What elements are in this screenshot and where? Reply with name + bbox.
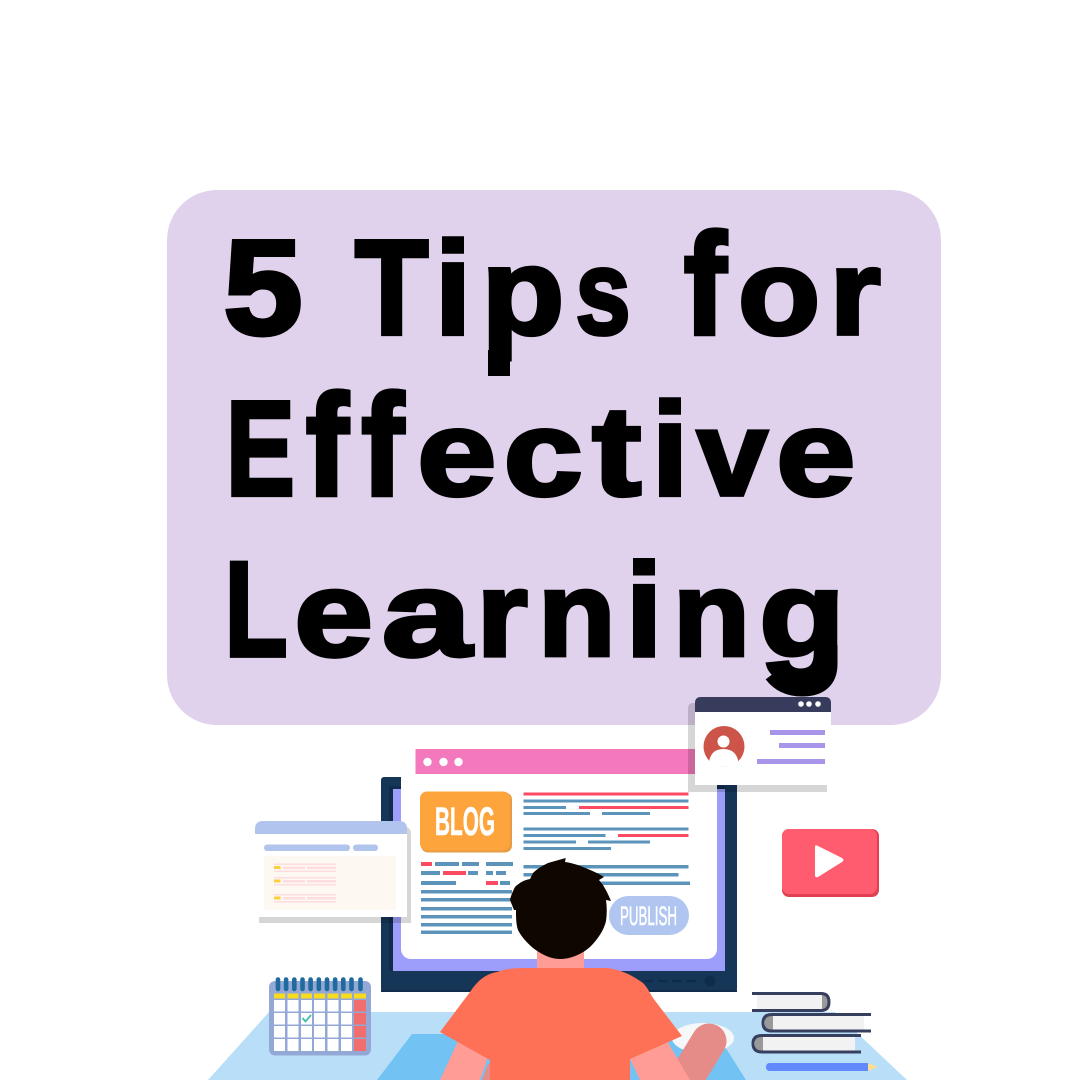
title line: Learning: a bbox=[382, 547, 473, 682]
publish button bbox=[609, 896, 689, 935]
title line: 5 Tips for bbox=[224, 204, 881, 376]
title line: Effective: e bbox=[776, 386, 855, 521]
blog badge bbox=[420, 792, 512, 852]
neck bbox=[537, 945, 584, 975]
mouse bbox=[672, 1023, 734, 1053]
left forearm shadow bbox=[482, 1064, 492, 1080]
shirt bbox=[440, 968, 682, 1080]
profile popup window bbox=[688, 697, 831, 792]
title line: 5 Tips for: s bbox=[576, 226, 631, 360]
icon: user avatar bbox=[704, 726, 744, 767]
left arm bbox=[440, 1041, 488, 1080]
right forearm bbox=[670, 1041, 709, 1080]
title line: 5 Tips for: T bbox=[355, 212, 428, 364]
books stack bbox=[752, 994, 871, 1052]
title line: Effective: c bbox=[504, 386, 583, 521]
title line: 5 Tips for: p bbox=[482, 224, 564, 361]
person at desk bbox=[440, 858, 709, 1080]
title line: Learning: e bbox=[294, 546, 373, 681]
title line: 5 Tips for: f bbox=[684, 204, 727, 365]
title line: Effective: t bbox=[592, 381, 641, 523]
title line: 5 Tips for: 5 bbox=[224, 213, 302, 363]
icon: video play button bbox=[782, 829, 879, 897]
icon: calendar bbox=[269, 980, 371, 1056]
title line: Learning bbox=[225, 534, 845, 686]
right arm bbox=[630, 1041, 690, 1080]
title line: Effective: f bbox=[362, 365, 405, 526]
title bbox=[224, 204, 881, 686]
title line: Learning: i bbox=[626, 536, 662, 684]
title line: Learning: n bbox=[673, 547, 750, 682]
title line: 5 Tips for: o bbox=[738, 225, 820, 360]
title line: 5 Tips for: i bbox=[435, 214, 471, 362]
list window bbox=[255, 821, 411, 923]
head and hair bbox=[510, 858, 611, 959]
title line: Learning: g bbox=[759, 547, 845, 682]
monitor bbox=[381, 749, 737, 992]
article text lines bbox=[421, 792, 690, 934]
pencil bbox=[766, 1063, 878, 1071]
title line: Effective: e bbox=[417, 386, 496, 521]
blog badge: BLOG bbox=[435, 800, 495, 844]
browser bar bbox=[416, 749, 706, 774]
title line: Learning: L bbox=[225, 534, 288, 685]
desk bbox=[208, 1012, 907, 1080]
title line: Effective: v bbox=[697, 387, 768, 521]
title line: 5 Tips for: r bbox=[830, 225, 881, 360]
title panel bbox=[167, 190, 941, 725]
title line: Learning: n bbox=[538, 547, 616, 682]
title line: Effective bbox=[226, 365, 855, 526]
title line: Effective: f bbox=[306, 365, 349, 526]
title line: Effective: i bbox=[652, 375, 688, 523]
publish button: PUBLISH bbox=[620, 901, 677, 931]
chair back bbox=[528, 1077, 592, 1080]
title line: Effective: E bbox=[226, 374, 295, 524]
title line: Learning: r bbox=[477, 546, 528, 682]
